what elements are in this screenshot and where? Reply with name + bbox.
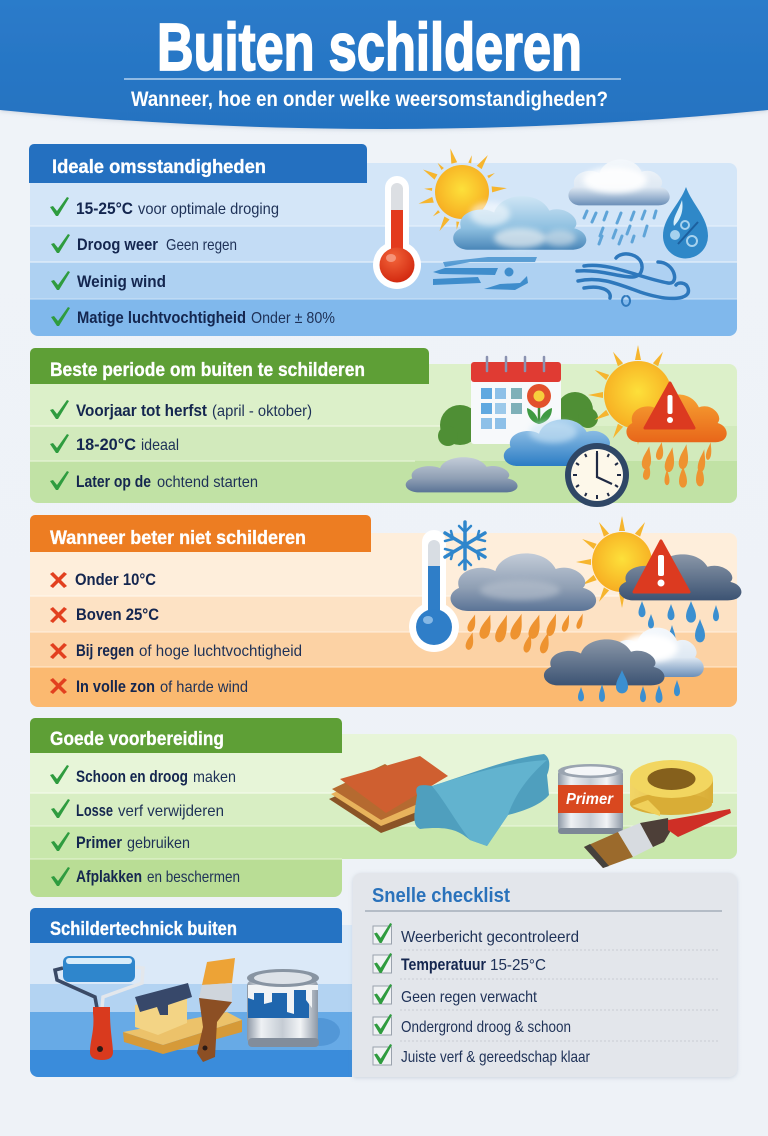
title: Buiten schilderen [157, 10, 582, 85]
panel: beste periode [30, 345, 737, 507]
icon: paint brush [584, 809, 731, 868]
icon: orange rain [641, 442, 713, 488]
list: ideale omstandigheden: voor optimale droging [138, 201, 279, 218]
icon: dark cloud with warning [619, 541, 741, 600]
list: ideale omstandigheden: Onder ± 80% [251, 310, 335, 327]
icon: bushes [438, 392, 598, 446]
panel: wanneer beter niet [30, 515, 741, 707]
list: goede voorbereiding: Losse [76, 801, 113, 820]
subtitle: Wanneer, hoe en onder welke weersomstandigheden? [131, 88, 608, 111]
icon: tape [630, 760, 713, 816]
list: wanneer beter niet: Onder 10°C [75, 570, 156, 589]
icon: water streaks [433, 257, 537, 290]
panel: snelle checklist [353, 873, 737, 1077]
list: beste periode: ideaal [141, 437, 179, 454]
heading: schildertechniek [30, 908, 342, 943]
list: goede voorbereiding: Afplakken [76, 867, 142, 886]
list: goede voorbereiding: verf verwijderen [118, 803, 224, 820]
icon: cloud blue [453, 196, 586, 250]
heading: wanneer beter niet: Wanneer beter niet schilderen [50, 528, 306, 549]
icon: sun [576, 516, 652, 608]
list: ideale omstandigheden: Weinig wind [77, 272, 166, 291]
icon: grey cloud [406, 457, 518, 492]
icon: primer can [558, 764, 623, 834]
list: beste periode: ochtend starten [157, 474, 258, 491]
icon: primer can: Primer [566, 791, 614, 808]
list: wanneer beter niet [50, 570, 302, 696]
list: checklist items: Ondergrond droog & schoon [401, 1019, 571, 1036]
icon: thermometer warm [373, 176, 421, 289]
list: beste periode [50, 400, 312, 491]
icon: paint roller [55, 956, 143, 1060]
list: wanneer beter niet: Bij regen [76, 641, 134, 660]
heading: wanneer beter niet [30, 515, 371, 552]
icon: sun [418, 148, 507, 232]
icon: dark rain cloud [544, 639, 680, 703]
icon: wind [577, 254, 688, 306]
panel: schildertechniek [30, 908, 352, 1077]
header banner [0, 0, 768, 129]
panel: ideale omstandigheden [29, 144, 737, 336]
list: goede voorbereiding [50, 765, 240, 886]
list: ideale omstandigheden: Geen regen [166, 237, 237, 254]
list: ideale omstandigheden [50, 197, 335, 327]
icon: cloth [414, 754, 549, 846]
icon: white cloud [607, 628, 704, 677]
icon: blue rain [638, 601, 719, 645]
list: goede voorbereiding: Primer [76, 833, 122, 852]
icon: clock [565, 443, 629, 507]
list: ideale omstandigheden: Droog weer [77, 235, 158, 254]
heading: beste periode: Beste periode om buiten te schilderen [50, 360, 365, 381]
list: goede voorbereiding: Schoon en droog [76, 767, 188, 786]
list: goede voorbereiding: maken [193, 769, 236, 786]
icon: snowflake [445, 522, 485, 569]
heading: snelle checklist: Snelle checklist [372, 885, 510, 907]
icon: calendar [471, 357, 561, 444]
heading: goede voorbereiding: Goede voorbereiding [50, 729, 224, 750]
icon: orange rain [465, 612, 585, 654]
list: ideale omstandigheden: 15-25°C [76, 199, 133, 218]
icon: humidity drop [663, 187, 708, 258]
panel: goede voorbereiding [30, 718, 737, 897]
list: beste periode: Later op de [76, 472, 151, 491]
list: beste periode: (april - oktober) [212, 403, 312, 420]
list: beste periode: Voorjaar tot herfst [76, 401, 207, 420]
icon: blue cloud [504, 419, 619, 466]
list: wanneer beter niet: In volle zon [76, 677, 155, 696]
icon: sun [588, 345, 672, 445]
list: checklist items: 15-25°C [490, 957, 546, 974]
icon: rain cloud [568, 159, 670, 244]
heading: ideale omstandigheden: Ideale omsstandigheden [52, 157, 266, 178]
list: checklist items: Juiste verf & gereedschap klaar [401, 1049, 591, 1066]
list: wanneer beter niet: Boven 25°C [76, 605, 159, 624]
icon: orange cloud with warning [626, 383, 727, 442]
list: wanneer beter niet: of harde wind [160, 679, 248, 696]
list: goede voorbereiding: en beschermen [147, 869, 240, 886]
icon: flower [527, 384, 552, 424]
heading: goede voorbereiding [30, 718, 342, 753]
icon: thermometer cold [409, 530, 459, 652]
icon: paint can [247, 969, 340, 1047]
list: checklist items: Temperatuur [401, 955, 486, 974]
list: checklist items: Weerbericht gecontroleerd [401, 929, 579, 946]
icon: sandpaper [329, 756, 448, 833]
heading: beste periode [30, 348, 429, 384]
heading: schildertechniek: Schildertechnick buiten [50, 919, 237, 940]
icon: brush [197, 958, 235, 1062]
list: ideale omstandigheden: Matige luchtvochtigheid [77, 308, 246, 327]
heading: ideale omstandigheden [29, 144, 367, 183]
list: checklist items [373, 923, 591, 1066]
icon: grey storm cloud [451, 553, 596, 611]
list: wanneer beter niet: of hoge luchtvochtigheid [139, 643, 302, 660]
list: checklist items: Geen regen verwacht [401, 989, 537, 1006]
list: beste periode: 18-20°C [76, 435, 136, 454]
icon: scraper on wood [123, 983, 242, 1054]
list: goede voorbereiding: gebruiken [127, 835, 190, 852]
